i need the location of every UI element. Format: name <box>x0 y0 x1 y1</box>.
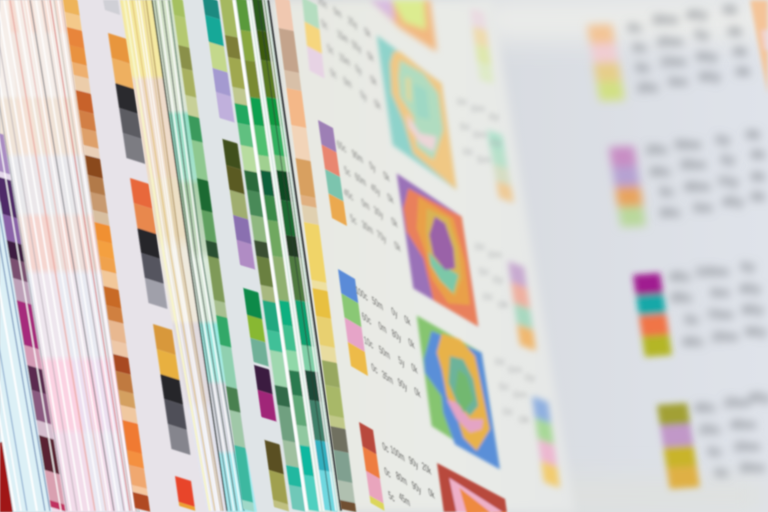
cmyk labels: mint strip: 0m <box>333 4 342 21</box>
far page cmyk labels: 0c <box>633 40 647 55</box>
cmyk labels: blue strip: 0y <box>390 305 399 321</box>
blurred labels beside far strips: 0y <box>491 138 501 149</box>
far page cmyk labels: 0y <box>721 152 736 167</box>
olive and green edge column <box>220 0 305 512</box>
far page cmyk labels: 45y <box>722 194 745 209</box>
cmyk labels: mint strip: 15m <box>338 50 351 69</box>
cmyk labels: blue strip <box>354 283 422 401</box>
cmyk labels: purple strip: 0m <box>361 196 370 213</box>
cmyk labels: mint strip: 0c <box>320 17 329 33</box>
far page cmyk labels: 0k <box>723 2 738 17</box>
far page cmyk labels: 5y <box>695 27 710 42</box>
blurred labels beside far strips: 5c <box>499 382 509 393</box>
cmyk labels: mint strip: 0m <box>343 74 352 91</box>
purple and magenta swatch column <box>0 130 66 512</box>
cmyk labels: red strip: 45m <box>398 490 411 509</box>
far page cmyk labels: 30c <box>649 164 671 179</box>
cmyk labels: mint strip: 0k <box>363 25 372 41</box>
blurred labels beside far strips: 0m <box>471 104 485 115</box>
far page cmyk labels <box>628 2 768 480</box>
far page cmyk labels: 0m <box>711 285 729 300</box>
cmyk labels: purple strip: 65c <box>336 137 347 156</box>
dark red sliver <box>0 442 13 512</box>
far page cmyk labels: 25c <box>699 422 721 437</box>
light blue page edges <box>0 196 52 512</box>
swatches on first pale page <box>103 0 195 511</box>
far page cmyk labels: 40y <box>739 281 762 296</box>
blurred labels beside far strips: 0y <box>525 373 535 384</box>
far page cmyk labels: 0k <box>751 169 766 184</box>
cmyk labels: red strip: 5c <box>387 489 396 505</box>
cmyk labels: blue strip: 35m <box>381 368 394 387</box>
far page cmyk labels: 30m <box>739 460 765 475</box>
far page cmyk labels: 25m <box>724 395 750 410</box>
thin page edges <box>234 0 341 511</box>
cmyk labels: blue strip: 0k <box>407 336 416 352</box>
far page cmyk labels: 5c <box>660 184 674 199</box>
blurred labels beside far strips <box>457 97 535 426</box>
colour image: top cropped pattern <box>370 0 437 52</box>
strip: faint lilac pink green orange <box>508 261 536 351</box>
far page cmyk labels: 90y <box>745 324 768 339</box>
fan of page edges: dark and bright green stack <box>233 0 342 512</box>
blurred labels beside far strips: 5c <box>460 122 470 133</box>
blurred labels beside far strips: 0c <box>463 147 473 158</box>
cmyk labels: blue strip: 50m <box>371 294 384 313</box>
far page cmyk labels: 0y <box>741 259 756 274</box>
cmyk labels: purple strip: 0y <box>368 159 377 175</box>
far page cmyk labels: 5c <box>708 444 722 459</box>
far page cmyk labels: 100m <box>695 264 729 279</box>
far page cmyk labels: 5c <box>636 60 650 75</box>
blurred labels beside far strips: 0c <box>457 97 467 108</box>
far page cmyk labels: 30c <box>659 205 681 220</box>
cmyk labels: red strip: 80m <box>395 469 408 488</box>
far page cmyk labels: 45c <box>669 269 691 284</box>
cmyk labels: mint strip: 0k <box>373 97 382 113</box>
cmyk labels: mint strip: 25y <box>347 13 358 32</box>
far page cmyk labels: 0k <box>746 127 761 142</box>
cmyk labels: blue strip: 90y <box>397 375 408 394</box>
far page cmyk labels: 0k <box>736 64 751 79</box>
cmyk labels: red strip: 90y <box>411 478 422 497</box>
cmyk labels: purple strip: 90m <box>351 147 364 166</box>
cmyk labels: mint strip: 0k <box>366 49 375 65</box>
blurred labels beside far strips: 0c <box>483 292 493 303</box>
strip: faint mint and orange <box>487 130 514 203</box>
strip: faint green and yellow <box>470 8 494 84</box>
green swatch column <box>172 0 254 512</box>
far page cmyk labels: 0k <box>733 44 748 59</box>
far page cmyk labels: 40c <box>682 334 704 349</box>
cmyk labels: purple strip: 60m <box>354 170 367 189</box>
far page cmyk labels: 15m <box>660 54 686 69</box>
far page cmyk labels: 20m <box>734 439 760 454</box>
teal, lavender and green swatch column <box>202 0 289 512</box>
cmyk labels: purple strip: 30y <box>373 203 384 222</box>
cmyk labels: blue strip: 0c <box>370 361 379 377</box>
far page cmyk labels: 20c <box>646 142 668 157</box>
far page cmyk labels: 40y <box>686 7 709 22</box>
cmyk labels: blue strip: 0k <box>410 361 419 377</box>
far page cmyk labels: 80y <box>742 302 765 317</box>
far page cmyk labels: 45m <box>730 417 756 432</box>
fan of page edges: yellow and mint stack <box>120 0 257 512</box>
cmyk labels: mint strip: 0k <box>369 73 378 89</box>
cmyk labels: mint strip: 55y <box>351 37 362 56</box>
amber and black swatch strip <box>153 324 190 455</box>
cmyk labels: purple strip: 0k <box>393 239 402 255</box>
blurred labels beside far strips: 0m <box>473 130 487 141</box>
swatch strip: purple salmon teal orange <box>318 120 347 226</box>
far page cmyk labels: 0c <box>628 20 642 35</box>
blurred labels beside far strips: 0m <box>513 390 527 401</box>
cmyk labels: purple strip: 0k <box>390 215 399 231</box>
cmyk labels: blue strip: 5y <box>397 354 406 370</box>
far page cmyk labels: 85c <box>671 290 693 305</box>
cmyk labels: blue strip: 0k <box>403 313 412 329</box>
far page cmyk labels: 0k <box>751 189 766 204</box>
far page cmyk labels: 0m <box>694 200 712 215</box>
cmyk labels: purple strip: 0k <box>382 169 391 185</box>
cmyk labels: purple strip <box>336 137 402 255</box>
red-orange and black swatch strip <box>130 178 168 309</box>
grey swatch at top <box>103 0 120 15</box>
cmyk labels: blue strip: 80y <box>391 326 402 345</box>
blurred labels beside far strips: 0m <box>508 365 522 376</box>
far page cmyk labels: 60y <box>699 69 722 84</box>
far page cmyk labels: 70y <box>717 174 740 189</box>
far page cmyk labels: 0m <box>669 74 687 89</box>
far page cmyk labels: 20c <box>637 80 659 95</box>
cmyk labels: blue strip: 10c <box>363 333 374 352</box>
red swatch strip <box>175 476 195 511</box>
blurred labels beside far strips: 0y <box>493 275 503 286</box>
top right page corner <box>750 0 768 95</box>
far page cmyk labels: 30m <box>652 12 678 27</box>
cmyk labels: purple strip: 30m <box>361 218 374 237</box>
blurred labels beside far strips: 5c <box>479 267 489 278</box>
blurred labels beside far strips: 0m <box>488 250 502 261</box>
cmyk labels: red strip <box>381 440 436 509</box>
far page cmyk labels: 20m <box>712 329 738 344</box>
tan, yellow and olive edge column <box>275 0 356 512</box>
cmyk labels: blue strip: 50m <box>378 343 391 362</box>
blurred labels beside far strips: 0y <box>489 112 499 123</box>
far page cmyk labels: 35m <box>680 157 706 172</box>
cmyk labels: purple strip: 45c <box>343 185 354 204</box>
far page cmyk labels: 5c <box>685 312 699 327</box>
cmyk labels: blue strip: 0k <box>413 385 422 401</box>
far page swatch strip: magenta teal orange olive <box>633 273 672 357</box>
far page cmyk labels: 40m <box>684 179 710 194</box>
cmyk labels: red strip: 0k <box>427 486 436 502</box>
strip: faint blue green pink yellow <box>532 396 560 488</box>
blurred labels beside far strips: 0c <box>503 407 513 418</box>
cmyk labels: purple strip: 45y <box>370 180 381 199</box>
cmyk labels: purple strip: 5c <box>349 212 358 228</box>
far swatch strips on the main page <box>470 8 560 488</box>
swatch strip: mint yellow lilac <box>302 0 324 78</box>
colour image: teal pattern <box>377 35 457 190</box>
colour image: red and orange pattern <box>437 463 512 512</box>
cmyk labels: red strip: 90y <box>408 453 419 472</box>
far page cmyk labels: 0c <box>715 465 729 480</box>
swatch strip: blue green pink yellow <box>338 269 368 376</box>
cmyk labels: blue strip: 0m <box>378 319 387 336</box>
blurred labels beside far strips: 0c <box>475 242 485 253</box>
cmyk labels: mint strip <box>317 0 382 113</box>
far page cmyk labels: 0k <box>728 24 743 39</box>
blurred labels beside far strips: 5m <box>477 155 491 166</box>
cmyk labels: mint strip: 5c <box>326 42 335 58</box>
cmyk labels: mint strip: 15m <box>336 27 349 46</box>
far page swatch strip: olive lilac yellow amber <box>657 403 700 489</box>
far page cmyk labels: 0k <box>751 147 766 162</box>
dark green edge strip <box>252 0 337 512</box>
cmyk labels: red strip: 20k <box>421 459 432 478</box>
blurred labels beside far strips: 0c <box>495 357 505 368</box>
far page cmyk labels: 20m <box>657 34 683 49</box>
colour image: green and blue pattern <box>417 315 500 469</box>
cmyk labels: blue strip: 100c <box>354 283 369 304</box>
cmyk labels: mint strip: 0y <box>359 88 368 104</box>
orange swatch column <box>62 0 150 512</box>
thin edge lines <box>0 0 136 511</box>
cmyk labels: mint strip: 0y <box>354 62 363 78</box>
far page cmyk labels: 50m <box>675 137 701 152</box>
panel: main colour chart page <box>270 0 575 512</box>
colour image: purple pattern <box>397 173 478 327</box>
cmyk labels: purple strip: 70y <box>376 227 387 246</box>
cmyk labels: red strip: 100m <box>389 443 405 464</box>
far page swatch strip: peach pink tan lime <box>587 24 625 101</box>
far page cmyk labels: 0y <box>716 132 731 147</box>
cmyk labels: mint strip: 0c <box>329 66 338 82</box>
cmyk labels: purple strip: 0k <box>386 191 395 207</box>
fan of page edges: pastel left stack <box>0 0 136 512</box>
cmyk labels: red strip: 0c <box>383 465 392 481</box>
far page cmyk labels: 70m <box>707 307 733 322</box>
bright green edge strip <box>236 0 319 512</box>
cmyk labels: blue strip: 60c <box>361 309 372 328</box>
panel: far-left pale page <box>70 0 225 512</box>
far page cmyk labels: 40c <box>694 400 716 415</box>
blurred labels beside far strips: 0k <box>519 415 530 426</box>
cmyk labels: purple strip: 5c <box>343 164 352 180</box>
far page swatch strip: mauve lilac orange green <box>609 146 646 227</box>
far page cmyk labels: 50y <box>696 49 719 64</box>
orange and black swatch strip <box>108 33 146 164</box>
blurred labels beside far strips: 0k <box>498 300 509 311</box>
cmyk labels: red strip: 0c <box>381 440 390 456</box>
panel: pale page behind teal swatches <box>170 0 310 512</box>
swatch strip: red orange pink yellow <box>359 422 385 511</box>
